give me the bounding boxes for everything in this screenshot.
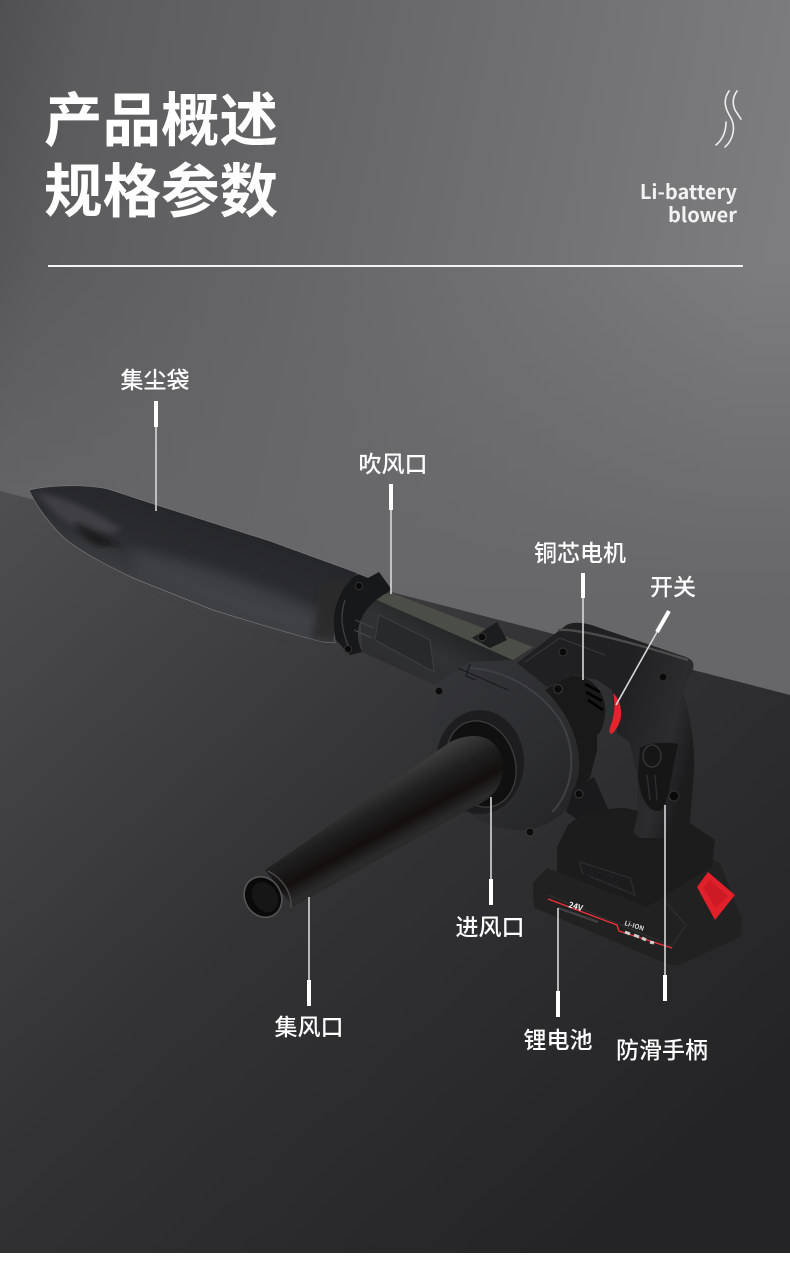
product: blower	[29, 486, 742, 965]
callout: 集尘袋: 集尘袋	[120, 361, 190, 395]
callout: 吹风口: 吹风口	[358, 445, 428, 479]
title: 产品概述	[44, 73, 278, 158]
motor ring, vents and lower bracket	[526, 675, 612, 836]
subtitle: Li-battery	[640, 176, 738, 205]
divider	[48, 265, 743, 267]
title: 规格参数	[44, 144, 278, 229]
volute housing	[431, 660, 586, 830]
subtitle: blower	[668, 199, 737, 228]
callout: 锂电池: 锂电池	[524, 1021, 592, 1055]
title	[44, 73, 278, 229]
callout: 集风口: 集风口	[274, 1008, 344, 1042]
callout: 进风口: 进风口	[456, 908, 524, 942]
panel: background lower dark diagonal	[0, 491, 790, 1253]
tube bracket	[472, 622, 507, 648]
callout: 铜芯电机: 铜芯电机	[534, 534, 626, 568]
callout: 集尘袋	[120, 361, 190, 511]
callout: 进风口	[456, 797, 524, 942]
callout: 锂电池	[524, 908, 592, 1055]
icon: wind swirl	[716, 91, 741, 147]
blower tube	[360, 593, 533, 705]
callout: 铜芯电机	[534, 534, 626, 680]
dust bag	[29, 486, 358, 643]
battery pack: Li-ION	[623, 917, 646, 933]
callout: 集风口	[274, 897, 344, 1042]
red trigger	[609, 693, 621, 734]
battery pack	[533, 808, 742, 965]
battery pack: 24V	[567, 899, 584, 914]
callout: 防滑手柄	[616, 805, 708, 1065]
battery pack: LITHIUM	[582, 865, 622, 888]
callout: 吹风口	[358, 445, 428, 594]
callout: 防滑手柄: 防滑手柄	[616, 1031, 708, 1065]
callout: 开关: 开关	[650, 568, 696, 602]
subtitle	[640, 176, 738, 228]
collar ring	[334, 572, 392, 655]
air intake nozzle	[237, 736, 503, 924]
callout: 开关	[616, 568, 696, 705]
pistol handle	[517, 623, 694, 838]
